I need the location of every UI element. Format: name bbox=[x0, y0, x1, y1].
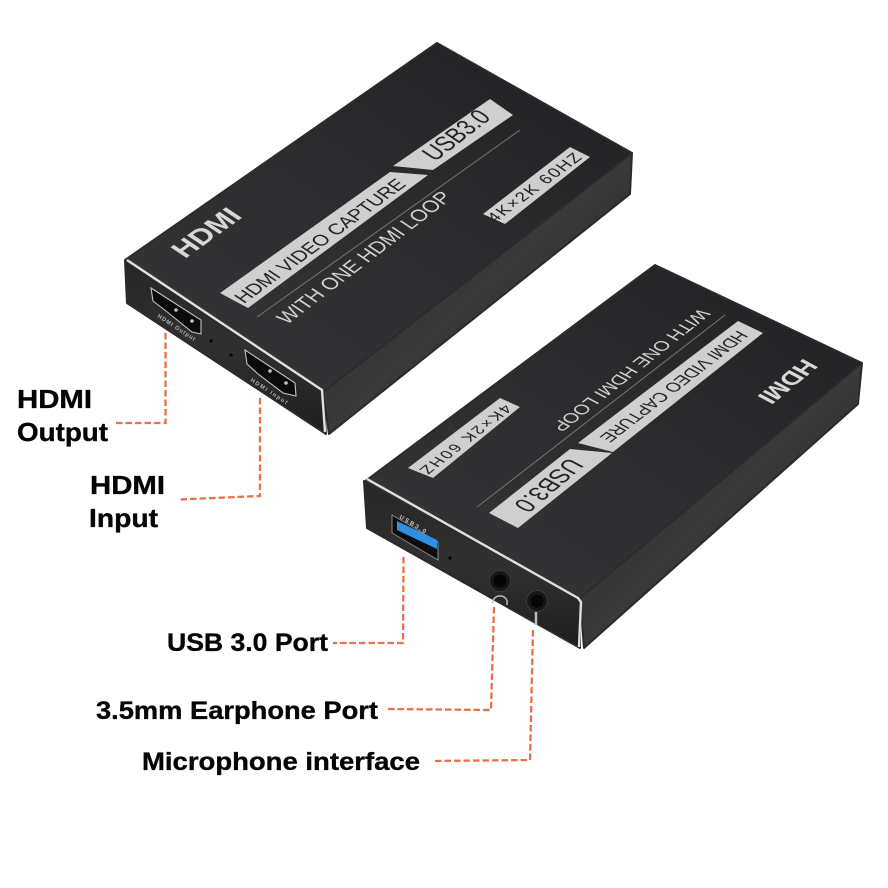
callout: 3.5mm Earphone Port: 3.5mm Earphone Port bbox=[96, 697, 379, 725]
brand text: HDMI: HDMI bbox=[164, 203, 248, 262]
label band: USB3.0: USB3.0 bbox=[417, 106, 497, 165]
icon: headphones bbox=[493, 596, 507, 605]
port: earphone jack bbox=[490, 570, 510, 592]
port: HDMI output bbox=[151, 288, 201, 334]
text: WITH ONE HDMI LOOP: WITH ONE HDMI LOOP bbox=[547, 306, 715, 434]
port: microphone jack bbox=[526, 590, 548, 612]
device front face bbox=[125, 261, 326, 434]
label band: HDMI VIDEO CAPTURE: HDMI VIDEO CAPTURE bbox=[230, 176, 411, 307]
device top face bbox=[125, 43, 632, 392]
callout: HDMI Input bbox=[89, 398, 260, 533]
label band: 4K×2K 60HZ: 4K×2K 60HZ bbox=[415, 402, 515, 476]
brand text: HDMI: HDMI bbox=[751, 355, 823, 407]
device: top-left capture card, HDMI side bbox=[125, 43, 632, 434]
label band: 4K×2K 60HZ: 4K×2K 60HZ bbox=[483, 150, 586, 225]
callout: HDMI Output: HDMI bbox=[17, 384, 92, 414]
port label: HDMI Input: HDMI Input bbox=[249, 378, 288, 406]
callout: HDMI Output: Output bbox=[17, 417, 108, 447]
device: bottom-right capture card, USB side bbox=[364, 265, 862, 648]
label band: HDMI VIDEO CAPTURE: HDMI VIDEO CAPTURE bbox=[595, 328, 752, 445]
callout: HDMI Input: HDMI bbox=[90, 470, 165, 500]
device front face bbox=[364, 481, 580, 648]
port label: HDMI Output: HDMI Output bbox=[156, 314, 196, 343]
text: WITH ONE HDMI LOOP: WITH ONE HDMI LOOP bbox=[272, 188, 457, 328]
device top face bbox=[364, 265, 862, 598]
port: USB 3.0 bbox=[392, 515, 438, 560]
callout: Microphone interface bbox=[142, 630, 533, 776]
callout: USB 3.0 Port: USB 3.0 Port bbox=[167, 629, 329, 657]
LED hole bbox=[448, 556, 452, 560]
callout: USB 3.0 Port bbox=[167, 557, 404, 657]
LED holes bbox=[209, 339, 233, 357]
port label: USB3.0: USB3.0 bbox=[398, 515, 427, 536]
device side face bbox=[580, 363, 862, 648]
icon: microphone bbox=[535, 612, 537, 625]
port: HDMI input bbox=[245, 350, 296, 396]
device side face bbox=[323, 153, 632, 434]
callout: 3.5mm Earphone Port bbox=[96, 607, 494, 725]
label band: USB3.0: USB3.0 bbox=[507, 454, 590, 516]
callout: Microphone interface: Microphone interface bbox=[142, 748, 420, 776]
silver edge bbox=[367, 479, 581, 647]
callout: HDMI Input: Input bbox=[89, 503, 158, 533]
silver edge bbox=[127, 260, 325, 432]
callout: HDMI Output bbox=[17, 333, 166, 447]
